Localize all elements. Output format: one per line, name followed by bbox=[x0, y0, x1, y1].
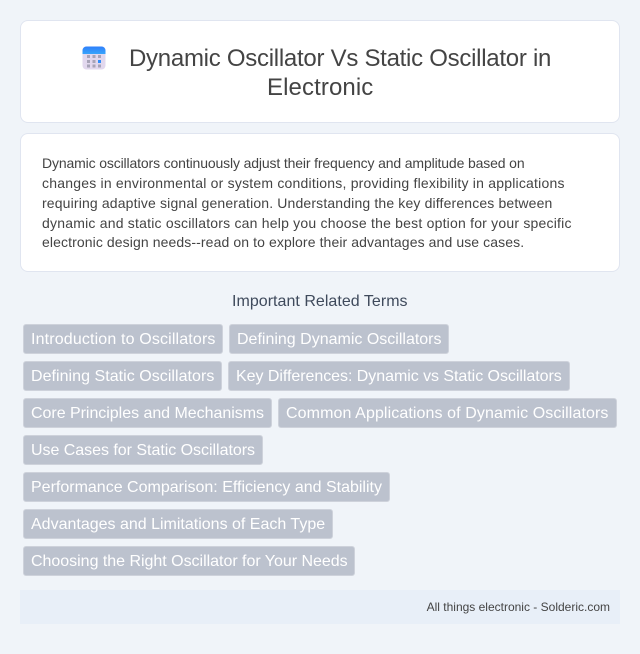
title: Dynamic Oscillator Vs Static Oscillator in bbox=[129, 45, 551, 72]
tag bbox=[23, 546, 355, 576]
tag: Use Cases for Static Oscillators bbox=[31, 442, 255, 459]
tag bbox=[23, 435, 263, 465]
intro paragraph: requiring adaptive signal generation. Understanding the key differences between bbox=[42, 195, 552, 211]
tag: Defining Static Oscillators bbox=[31, 368, 214, 385]
tag bbox=[23, 472, 390, 502]
panel: title card bbox=[20, 20, 620, 123]
tag: Performance Comparison: Efficiency and Stability bbox=[31, 479, 382, 496]
tag bbox=[23, 509, 333, 539]
tag bbox=[229, 324, 449, 354]
tag bbox=[278, 398, 617, 428]
panel: intro text card bbox=[20, 133, 620, 272]
tag: Defining Dynamic Oscillators bbox=[237, 331, 442, 348]
tag: Core Principles and Mechanisms bbox=[31, 405, 264, 422]
title bbox=[129, 45, 551, 101]
footer bar bbox=[20, 590, 620, 624]
tag bbox=[23, 398, 272, 428]
tag bbox=[228, 361, 570, 391]
tag: Introduction to Oscillators bbox=[31, 331, 216, 348]
intro paragraph: changes in environmental or system conditions, providing flexibility in applications bbox=[42, 175, 565, 191]
icon: calendar bbox=[82, 46, 106, 70]
tag bbox=[23, 324, 223, 354]
tag: Choosing the Right Oscillator for Your Needs bbox=[31, 553, 348, 570]
tag list bbox=[23, 324, 617, 576]
intro paragraph bbox=[42, 155, 572, 250]
intro paragraph: dynamic and static oscillators can help you choose the best option for your specific bbox=[42, 215, 572, 231]
tag bbox=[23, 361, 222, 391]
footer text: All things electronic - Solderic.com bbox=[427, 600, 610, 614]
heading: important related terms: Important Related Terms bbox=[232, 293, 408, 310]
tag: Advantages and Limitations of Each Type bbox=[31, 516, 325, 533]
title: Electronic bbox=[267, 74, 373, 101]
intro paragraph: Dynamic oscillators continuously adjust their frequency and amplitude based on bbox=[42, 155, 524, 171]
tag: Common Applications of Dynamic Oscillators bbox=[286, 405, 609, 422]
tag: Key Differences: Dynamic vs Static Oscillators bbox=[236, 368, 562, 385]
intro paragraph: electronic design needs--read on to explore their advantages and use cases. bbox=[42, 234, 524, 250]
